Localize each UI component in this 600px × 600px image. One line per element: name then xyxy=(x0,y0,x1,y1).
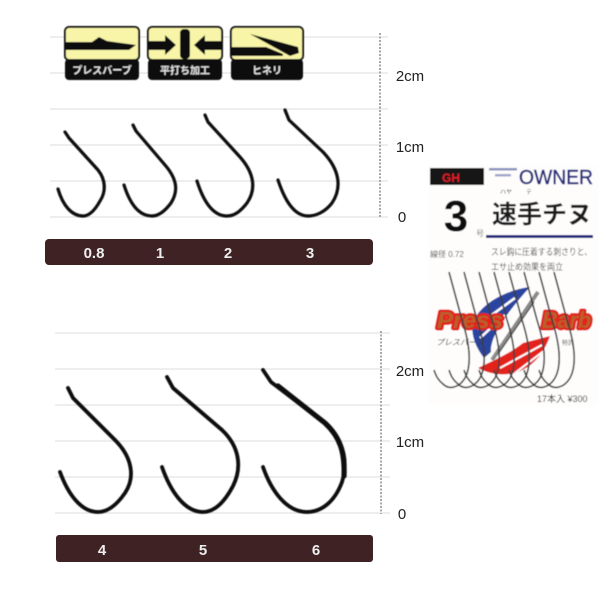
description: エサ止め効果を両立 xyxy=(491,261,563,272)
size bar: upper: 1 xyxy=(156,245,164,262)
hooks: upper row xyxy=(58,110,338,216)
logo: Press Barb xyxy=(436,307,591,347)
icon: press barb xyxy=(65,27,139,80)
scale labels: lower: 2cm xyxy=(396,363,424,380)
packaged hooks xyxy=(434,272,574,387)
size bar: upper xyxy=(45,239,373,265)
product name: テ xyxy=(526,189,532,196)
scale labels: lower: 1cm xyxy=(396,434,424,451)
size number 3: 3 xyxy=(444,192,468,241)
size bar: upper: 2 xyxy=(224,245,232,262)
hook size 6 xyxy=(263,370,345,512)
logo: swooshes xyxy=(472,287,550,374)
product name: 速手チヌ xyxy=(492,201,592,229)
icon: flattened forging xyxy=(148,27,222,80)
description xyxy=(491,246,592,272)
badge: GH xyxy=(430,168,484,185)
scale labels: upper xyxy=(396,68,424,226)
product package: 号 xyxy=(476,229,484,238)
size bar: upper: 0.8 xyxy=(84,245,104,262)
hook size 0.8 xyxy=(58,132,104,216)
hook size 2 xyxy=(197,115,253,216)
logo: Press Barb: Barb xyxy=(542,307,591,333)
size bar: lower: 5 xyxy=(199,542,207,559)
scale labels: lower: 0 xyxy=(398,506,406,523)
scale labels: lower xyxy=(396,363,424,523)
icon: twist xyxy=(231,27,303,80)
scale labels: upper: 0 xyxy=(398,209,406,226)
product name xyxy=(492,189,592,229)
hooks: lower row xyxy=(60,370,345,512)
icon: flattened forging: 平打ち加工 xyxy=(160,64,210,77)
product name: ハヤ xyxy=(500,189,512,196)
hook size 1 xyxy=(124,125,176,216)
icon: twist: ヒネリ xyxy=(252,65,282,77)
size bar: lower: 4 xyxy=(98,542,107,559)
product package xyxy=(428,165,598,405)
size bar: lower: 6 xyxy=(312,542,320,559)
hook size 3 xyxy=(278,110,338,216)
badge: GH: GH xyxy=(442,171,460,185)
scale labels: upper: 1cm xyxy=(396,139,424,156)
diameter: 線径 0.72 xyxy=(430,249,464,259)
scale labels: upper: 2cm xyxy=(396,68,424,85)
brand: OWNER xyxy=(489,167,593,189)
logo: Press Barb: Press xyxy=(437,307,503,333)
icon: press barb: プレスバーブ xyxy=(72,64,132,77)
size bar: lower xyxy=(56,535,373,562)
icons: hook features xyxy=(65,27,303,80)
brand: OWNER: OWNER xyxy=(519,167,593,189)
logo: Press Barb: 特許 xyxy=(562,339,574,347)
logo: Press Barb: プレスバーブ xyxy=(436,338,486,347)
hook size 5 xyxy=(162,377,238,512)
count and price: 17本入 ¥300 xyxy=(537,393,588,404)
hook size 4 xyxy=(60,388,131,512)
size bar: upper: 3 xyxy=(306,245,314,262)
